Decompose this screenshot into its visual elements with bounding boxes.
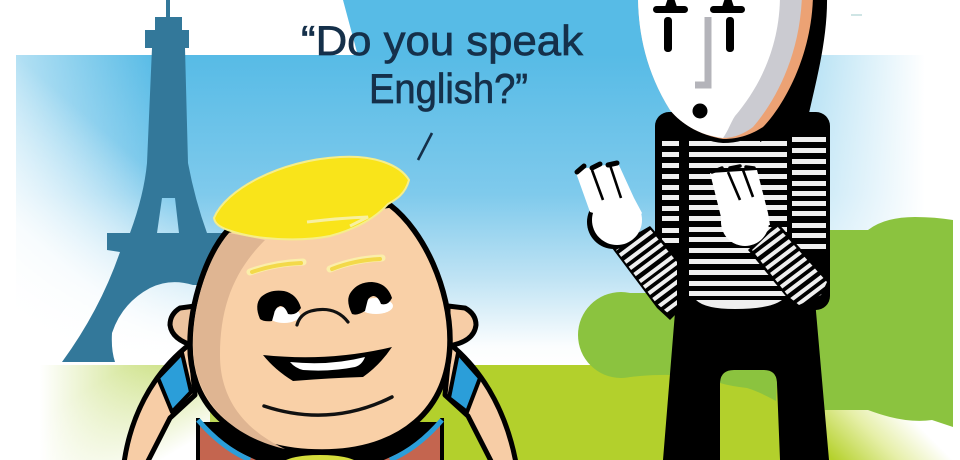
head [190,205,450,452]
speech tick [418,133,432,160]
sky background [16,0,960,365]
right arm [445,344,516,460]
shirt [198,418,442,460]
head orange edge [638,0,813,139]
hair highlight [307,217,368,226]
bushes [578,217,953,427]
teeth [290,357,365,371]
left sleeve [612,226,677,320]
hair [214,157,409,239]
mouth [263,347,392,381]
icon: Eiffel Tower [62,0,240,362]
shirt stripes [662,137,826,309]
left hand [575,163,642,249]
nose [297,309,348,325]
speech text: English?” [369,65,528,112]
figure: mime [575,0,834,460]
head shading [193,233,285,449]
head back edge [760,0,827,142]
speech text: “Do you speak [301,17,584,64]
chin line [264,397,392,415]
head chin shadow [668,112,772,143]
left backpack strap [158,353,191,412]
speck [851,14,862,16]
speech text [301,17,584,112]
right eye [348,282,393,315]
legs [663,300,829,460]
right backpack strap [449,353,480,412]
eyebrows [250,258,382,272]
grass [40,365,960,460]
right hand [710,166,770,246]
mouth [692,104,708,118]
right sleeve [748,226,827,305]
nose [695,17,708,85]
torso [655,112,830,310]
left ear [170,306,195,346]
eyes [653,0,745,52]
left arm [124,344,195,460]
figure: tourist [124,157,516,460]
left eye [257,291,301,323]
head grey shade [638,0,802,138]
right ear [448,306,476,346]
face white [638,0,780,138]
